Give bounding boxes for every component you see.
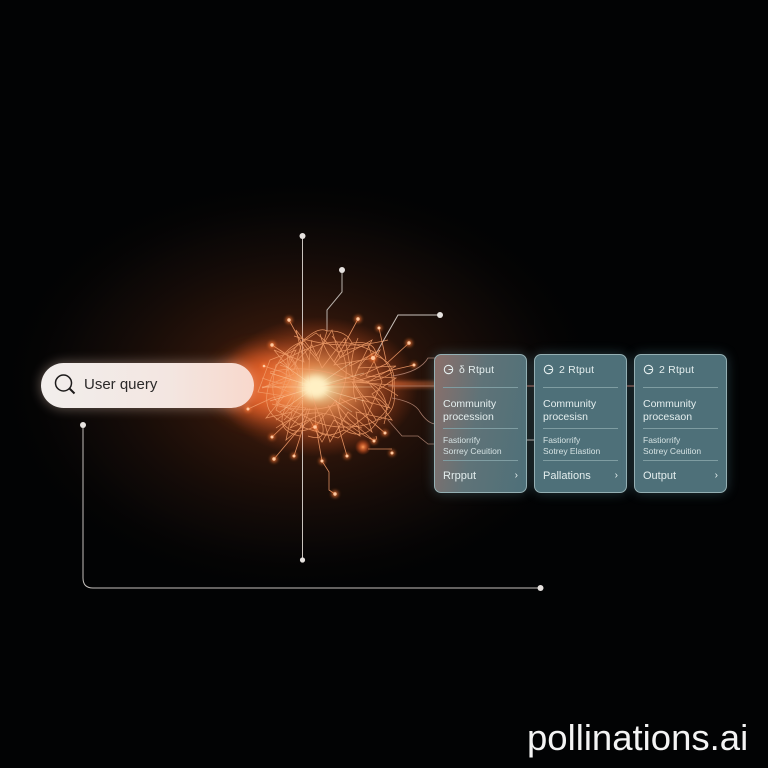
card 1 detail text: Sorrey Ceuition xyxy=(443,446,502,456)
card 1 detail text xyxy=(443,435,502,456)
card 1 main text: Community xyxy=(443,398,496,410)
card 3 main text: procesaon xyxy=(643,411,692,423)
neural burst xyxy=(218,316,418,498)
card 3 detail text: Fastiorrify xyxy=(643,435,680,445)
dense web xyxy=(258,330,398,442)
card 3 heading: 2 Rtput xyxy=(659,364,694,376)
connector: query to output line xyxy=(80,422,544,591)
card 1 main text: procession xyxy=(443,411,494,423)
node dots xyxy=(246,317,416,496)
filaments into the cards xyxy=(388,358,436,444)
card 2 detail text: Fastiorrify xyxy=(543,435,580,445)
search bar xyxy=(41,363,254,408)
card 1 icon xyxy=(444,364,454,374)
vertical axis line xyxy=(300,233,306,563)
beam to the cards xyxy=(390,381,510,388)
card 1 main text xyxy=(443,398,496,423)
outer filaments xyxy=(248,319,414,494)
card 1 detail text: Fastiorrify xyxy=(443,435,480,445)
card 2 main text: Community xyxy=(543,398,596,410)
card 2 footer label: Pallations xyxy=(543,470,591,482)
card 3 icon xyxy=(644,364,654,374)
card 1 footer label: Rrpput xyxy=(443,470,476,482)
connectors between the cards xyxy=(527,386,635,440)
panel: card 2 xyxy=(534,354,627,493)
card 2 main text: procesisn xyxy=(543,411,588,423)
card 2 detail text: Sotrey Elastion xyxy=(543,446,600,456)
icon: magnifying glass xyxy=(54,374,76,394)
core glow xyxy=(218,317,418,457)
connector: right node xyxy=(373,312,443,359)
panel: card 1 xyxy=(434,354,527,493)
connector: upper node xyxy=(327,267,345,331)
watermark: pollinations.ai xyxy=(527,717,748,758)
node halos xyxy=(245,316,417,498)
search text: User query xyxy=(84,376,157,393)
bright centre xyxy=(302,376,328,398)
card 2 icon xyxy=(544,364,554,374)
bar side glow xyxy=(220,353,312,417)
background haze xyxy=(0,170,610,600)
card 3 detail text xyxy=(643,435,701,456)
card 3 detail text: Sotrey Ceuition xyxy=(643,446,701,456)
card 3 footer label: Output xyxy=(643,470,676,482)
card 3 chevron: › xyxy=(715,470,718,481)
card 2 heading: 2 Rtput xyxy=(559,364,594,376)
orange spot xyxy=(355,439,371,455)
card 3 main text xyxy=(643,398,696,423)
card 2 chevron: › xyxy=(615,470,618,481)
card 1 heading: δ Rtput xyxy=(459,364,494,376)
card 3 main text: Community xyxy=(643,398,696,410)
card 1 chevron: › xyxy=(515,470,518,481)
card 2 detail text xyxy=(543,435,600,456)
panel: card 3 xyxy=(634,354,727,493)
card 2 main text xyxy=(543,398,596,423)
core rays xyxy=(262,362,372,412)
